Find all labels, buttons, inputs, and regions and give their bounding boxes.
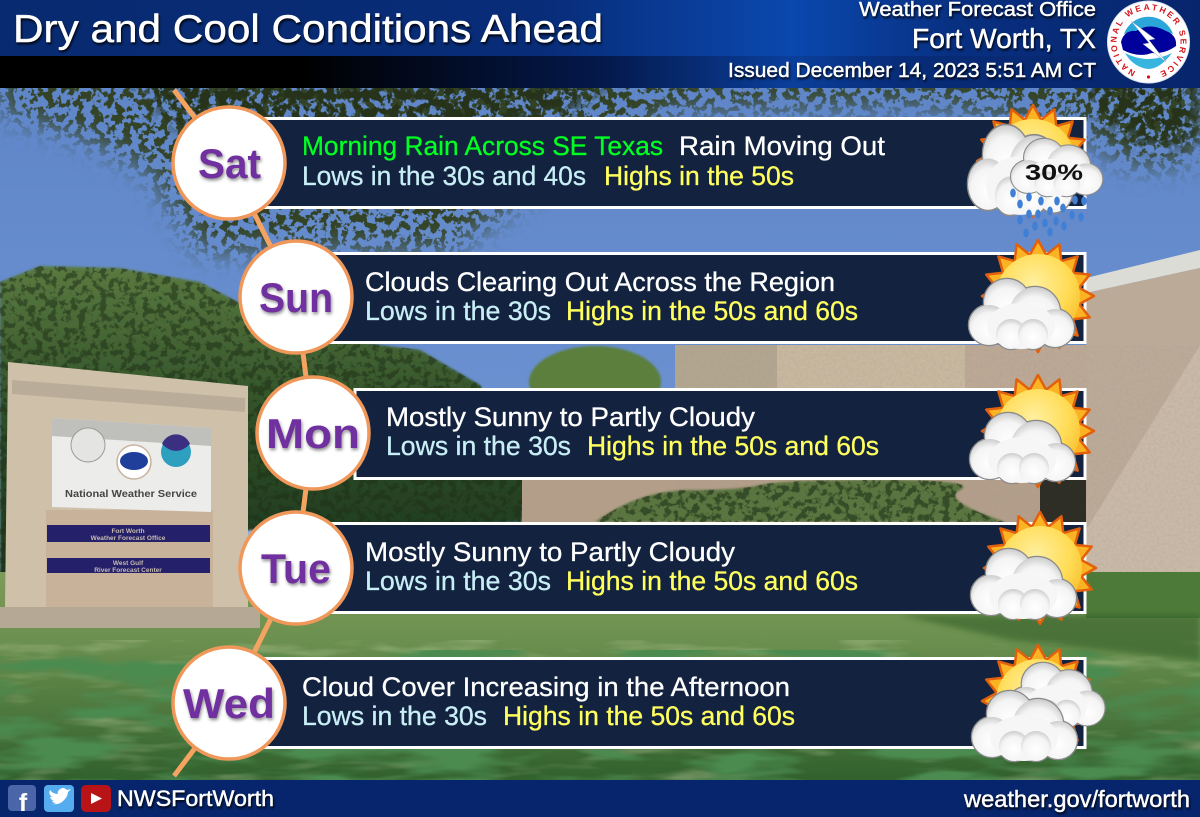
sign logos (71, 428, 191, 479)
sign plates: West Gulf (113, 560, 144, 567)
website: weather.gov/fortworth (963, 786, 1190, 812)
icon: Facebook: f (19, 789, 28, 817)
day label: Sun (259, 274, 333, 321)
panel: Tuesday forecast (240, 512, 1096, 624)
icon: partly cloudy (971, 512, 1096, 624)
headline: Clouds Clearing Out Across the Region (365, 267, 835, 297)
highs: Highs in the 50s and 60s (587, 431, 879, 461)
lows: Lows in the 30s (302, 701, 487, 731)
day circle (240, 512, 352, 624)
headline: Morning Rain Across SE Texas (302, 131, 663, 161)
icon: Twitter (44, 785, 74, 812)
day circle (173, 107, 285, 219)
office city: Fort Worth, TX (912, 23, 1096, 54)
tan building walls (522, 250, 1200, 572)
issued time: Issued December 14, 2023 5:51 AM CT (728, 60, 1096, 82)
header banner (0, 0, 1200, 88)
icon: mostly cloudy (972, 645, 1105, 761)
icon: rain cloud with sun, 30% (968, 105, 1102, 238)
title: Dry and Cool Conditions Ahead (13, 8, 603, 51)
sign: National Weather Service monument (0, 362, 260, 628)
highs: Highs in the 50s and 60s (566, 296, 858, 326)
footer banner (0, 780, 1200, 817)
panel: Wednesday forecast (173, 645, 1105, 761)
forecast bar (262, 658, 1085, 748)
lows: Lows in the 30s (365, 296, 551, 326)
headline: Mostly Sunny to Partly Cloudy (365, 537, 736, 567)
forecast bar (262, 118, 1085, 208)
sign plates (47, 525, 210, 574)
highs: Highs in the 50s and 60s (566, 566, 858, 596)
icon: NWS logo: NATIONAL WEATHER SERVICE (1110, 4, 1186, 78)
highs: Highs in the 50s and 60s (503, 701, 795, 731)
sign plates: Fort Worth (111, 528, 145, 535)
lows: Lows in the 30s (386, 431, 571, 461)
lawn (0, 572, 1200, 785)
sign plates: River Forecast Center (94, 567, 162, 574)
icon: partly cloudy (969, 240, 1094, 352)
panel: Monday forecast (257, 375, 1094, 489)
day circle (257, 377, 369, 489)
day label: Wed (183, 680, 275, 727)
headline: Mostly Sunny to Partly Cloudy (386, 402, 756, 432)
lows: Lows in the 30s and 40s (302, 161, 586, 191)
forecast bar (330, 254, 1085, 342)
orange timeline connector (174, 90, 313, 776)
day label: Mon (266, 410, 360, 457)
day label: Tue (261, 545, 331, 592)
panel: Sunday forecast (240, 240, 1094, 353)
headline: Cloud Cover Increasing in the Afternoon (302, 672, 790, 702)
green trees behind sign (0, 266, 661, 600)
sign plates: Weather Forecast Office (91, 535, 166, 542)
day label: Sat (198, 140, 261, 187)
top tree canopy (0, 60, 1200, 250)
social handle: NWSFortWorth (117, 786, 274, 811)
forecast bar (355, 390, 1085, 478)
icon: partly cloudy (970, 375, 1094, 487)
icon: YouTube (81, 785, 111, 812)
hedge (595, 480, 1005, 522)
day circle (173, 647, 285, 759)
precipitation chance: 30% (1025, 160, 1083, 185)
highs: Highs in the 50s (604, 161, 794, 191)
forecast bar (330, 524, 1085, 612)
sign lettering: National Weather Service (65, 488, 197, 500)
icon: Facebook (8, 785, 36, 817)
panel: Saturday forecast (173, 105, 1102, 238)
lows: Lows in the 30s (365, 566, 551, 596)
headline continued: Rain Moving Out (679, 131, 886, 161)
day circle (240, 241, 352, 353)
